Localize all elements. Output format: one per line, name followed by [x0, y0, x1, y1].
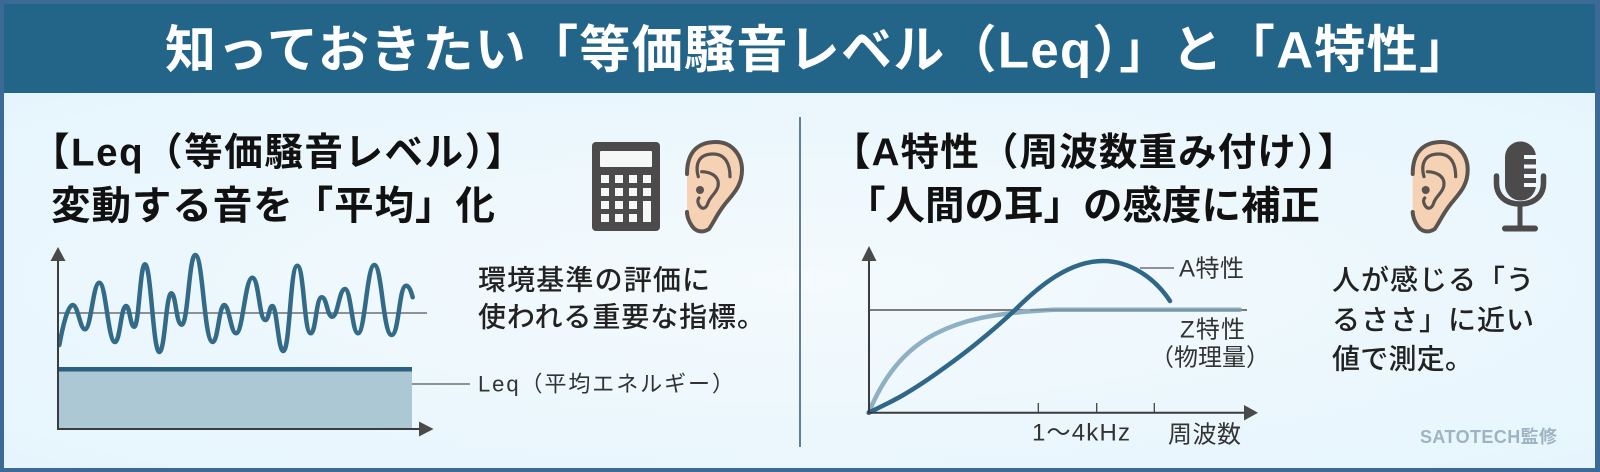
heading: Leq: 【Leq（等価騒音レベル）】 — [31, 132, 524, 174]
axes — [58, 258, 424, 429]
divider — [799, 117, 801, 447]
Leq level line — [58, 367, 412, 372]
label: Z-weighting — [1150, 316, 1270, 372]
frequency ticks — [1038, 403, 1154, 412]
title: 知っておきたい「等価騒音レベル（Leq）」と「A特性」 — [165, 22, 1470, 78]
label: A-weighting: A特性 — [1179, 256, 1244, 282]
panel: Leq — [31, 132, 765, 436]
icon: calculator — [592, 142, 660, 231]
Leq area — [59, 369, 412, 429]
heading: Leq — [31, 132, 524, 228]
note: Leq: 使われる重要な指標。 — [478, 302, 765, 332]
credit: SATOTECH監修 — [1420, 427, 1557, 447]
label: Z-weighting: （物理量） — [1150, 344, 1270, 372]
Leq callout: Leq（平均エネルギー） — [478, 372, 734, 396]
label: frequency axis: 周波数 — [1168, 422, 1241, 448]
chart: frequency weighting — [862, 246, 1258, 420]
label: Z-weighting: Z特性 — [1180, 316, 1245, 344]
note: A-weighting — [1332, 264, 1534, 374]
panel: A-weighting — [832, 132, 1544, 448]
note: A-weighting: 人が感じる「う — [1332, 264, 1534, 296]
note: A-weighting: 値で測定。 — [1332, 344, 1473, 374]
note: Leq: 環境基準の評価に — [478, 264, 710, 296]
icon: ear — [687, 142, 742, 231]
note: A-weighting: るささ」に近い — [1332, 304, 1534, 336]
label: frequency band: 1～4kHz — [1032, 420, 1130, 446]
heading: A-weighting: 【A特性（周波数重み付け）】 — [832, 132, 1356, 174]
A-weighting curve — [869, 261, 1170, 413]
heading: A-weighting: 「人間の耳」の感度に補正 — [846, 184, 1320, 228]
chart: fluctuating sound and Leq — [50, 247, 434, 436]
heading: A-weighting — [832, 132, 1356, 228]
note: Leq — [478, 264, 765, 332]
waveform — [59, 255, 413, 352]
heading: Leq: 変動する音を「平均」化 — [51, 184, 495, 228]
label: A-weighting — [1140, 256, 1244, 282]
title banner — [4, 4, 1595, 93]
axes — [869, 256, 1248, 413]
Z-weighting curve — [869, 310, 1240, 413]
icon: microphone — [1496, 142, 1544, 232]
icon: ear — [1413, 142, 1468, 231]
